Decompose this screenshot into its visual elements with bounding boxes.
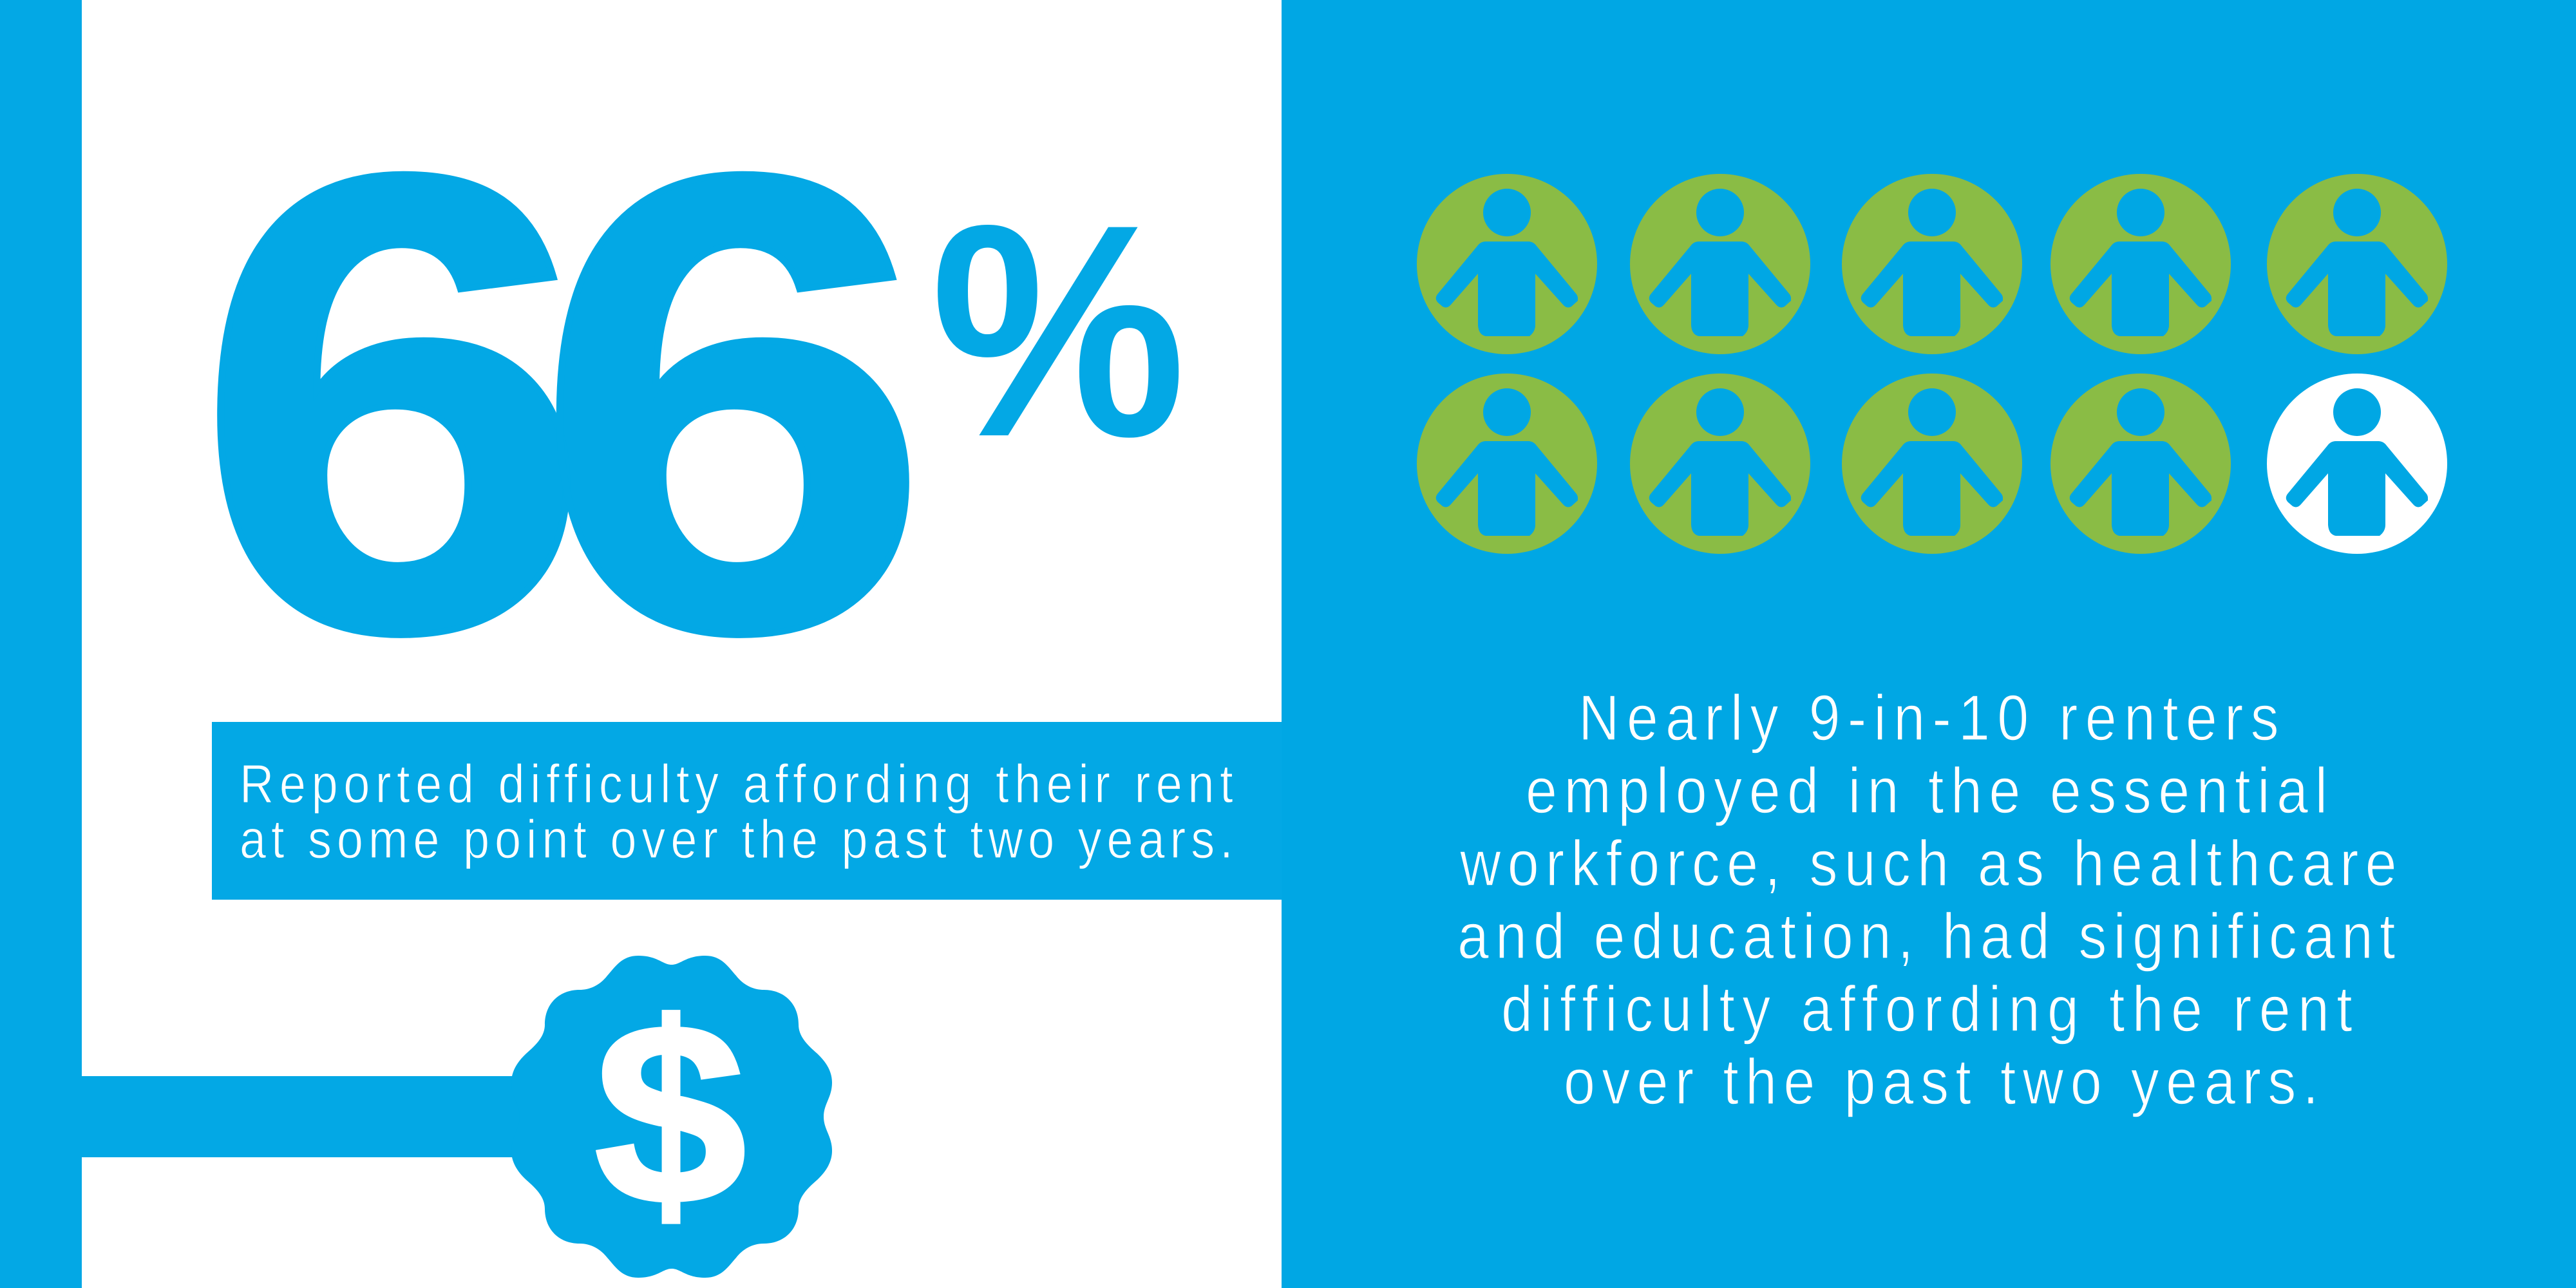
icon: person 9 (green) bbox=[2050, 374, 2231, 554]
text block: nearly 9-in-10 renters: over the past two years. bbox=[1564, 1046, 2318, 1117]
text block: nearly 9-in-10 renters: workforce, such as healthcare bbox=[1459, 828, 2397, 899]
icon: person 6 (green) bbox=[1417, 374, 1597, 554]
text block: nearly 9-in-10 renters: and education, had significant bbox=[1457, 900, 2395, 972]
icon: dollar badge with connector bar: $ bbox=[594, 971, 746, 1258]
panel: right blue panel bbox=[1282, 0, 2576, 1288]
caption text bbox=[240, 753, 1233, 869]
caption text: at some point over the past two years. bbox=[240, 809, 1233, 869]
icon: person 3 (green) bbox=[1842, 174, 2022, 354]
icon: person 8 (green) bbox=[1842, 374, 2022, 554]
icon: person 2 (green) bbox=[1630, 174, 1810, 354]
text block: nearly 9-in-10 renters bbox=[1457, 682, 2397, 1117]
icon: dollar badge with connector bar bbox=[82, 956, 832, 1278]
percent sign: % bbox=[931, 162, 1186, 500]
icon: person 7 (green) bbox=[1630, 374, 1810, 554]
pictogram: 9 of 10 renters bbox=[1417, 174, 2447, 554]
number: 66: 66 bbox=[194, 40, 914, 766]
text block: nearly 9-in-10 renters: Nearly 9-in-10 renters bbox=[1578, 682, 2279, 753]
text block: nearly 9-in-10 renters: employed in the essential bbox=[1526, 755, 2327, 826]
panel: left white stat panel with blue edge bar bbox=[0, 0, 1282, 1288]
text block: nearly 9-in-10 renters: difficulty affording the rent bbox=[1501, 973, 2353, 1045]
icon: person 5 (green) bbox=[2267, 174, 2447, 354]
icon: person 4 (green) bbox=[2050, 174, 2231, 354]
icon: person 1 (green) bbox=[1417, 174, 1597, 354]
icon: person 10 (white) bbox=[2267, 374, 2447, 554]
caption band: difficulty affording rent bbox=[212, 722, 1282, 900]
big statistic: 66% bbox=[194, 40, 1186, 766]
caption text: Reported difficulty affording their rent bbox=[240, 753, 1233, 814]
